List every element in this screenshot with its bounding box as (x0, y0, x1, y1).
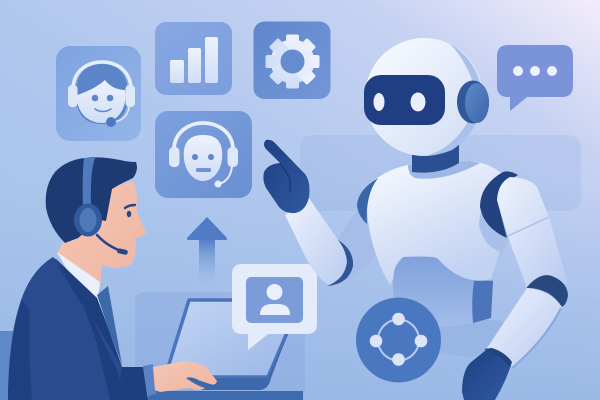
lower torso (392, 257, 493, 327)
microphone (97, 235, 124, 252)
hand on laptop (153, 361, 217, 392)
neck and face (57, 181, 146, 290)
arm behind torso, left (338, 205, 378, 282)
network badge (356, 298, 441, 382)
chat bubble: typing dots (497, 45, 573, 111)
eyes (374, 93, 384, 111)
pointing hand (263, 140, 310, 213)
right forearm (487, 288, 562, 367)
shirt collar (57, 252, 108, 330)
laptop (148, 300, 303, 400)
eye and brow (127, 211, 131, 217)
ear cup (74, 204, 102, 236)
visor (364, 75, 445, 125)
robot (263, 38, 568, 400)
head (365, 38, 483, 156)
hip (400, 320, 510, 358)
icon tile: gear (254, 22, 330, 99)
person: agent with headset (8, 157, 217, 400)
chat bubble: contact card (232, 264, 317, 350)
right shoulder joint (480, 171, 518, 238)
icon tile: robot face with headset (155, 111, 252, 198)
right cuff (484, 348, 512, 368)
right hand (462, 350, 510, 400)
shirt cuff (143, 364, 156, 396)
icon tile: agent face with headset (56, 46, 141, 141)
neck (412, 143, 459, 173)
hair (46, 157, 137, 243)
headset band (83, 158, 95, 206)
shoulder shadow (474, 195, 512, 265)
suit jacket (8, 257, 148, 400)
left cuff (327, 240, 353, 286)
left forearm (285, 198, 352, 285)
arrow: upward (187, 217, 227, 286)
right elbow (527, 275, 568, 307)
left shoulder joint (357, 178, 378, 224)
icon tile: bar chart (155, 22, 232, 95)
tie (97, 286, 122, 365)
right upper arm (497, 177, 568, 288)
torso (367, 161, 502, 285)
ear (457, 80, 489, 124)
